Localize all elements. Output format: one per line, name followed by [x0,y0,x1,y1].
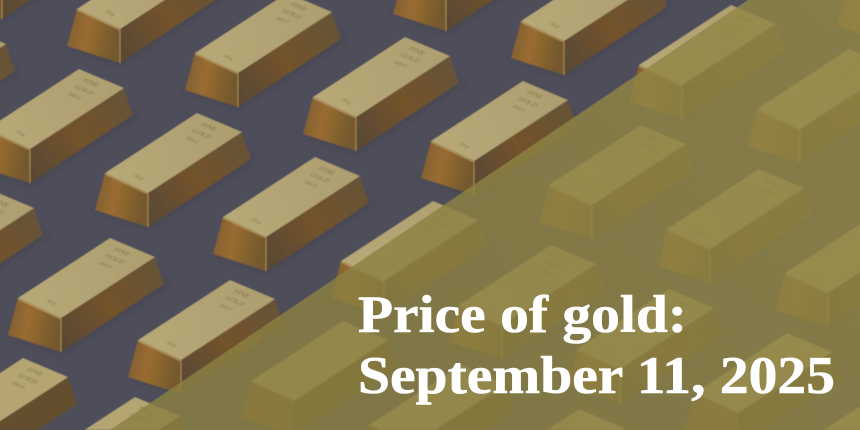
gold bar cut by bottom edge: FINE [24,367,45,377]
gold bar [128,280,286,396]
gold bar cut by bottom edge [824,377,860,430]
gold bar [185,0,343,109]
gold bar [421,81,579,197]
gold bar [0,69,135,185]
gold bar [449,245,607,361]
gold bar cut by bottom edge [368,365,515,430]
gold bar [539,125,697,241]
gold bar [629,5,787,121]
gold bar [8,238,166,354]
gold bar [0,25,17,141]
gold bar cut by bottom edge [84,397,185,430]
gold bar [657,169,815,285]
gold bar [67,0,225,65]
title line 1: Price of gold: [358,286,687,344]
gold bar cut by bottom edge [547,409,625,430]
gold bar cut by bottom edge [241,321,397,430]
gold bar cut by bottom edge [685,333,841,430]
gold bar [331,201,489,317]
gold bar [747,49,860,165]
gold bar cut by bottom edge: FINE [136,406,157,416]
gold bar [0,189,45,305]
title line 2: September 11, 2025 [358,347,835,405]
gold bar [213,157,371,273]
gold bar [95,113,253,229]
gold bar [303,37,461,153]
gold bar cut by bottom edge: 999.9 [10,381,26,390]
gold bar cut by bottom edge [0,358,77,430]
gold bar cut by bottom edge: GOLD [15,373,40,385]
gold bar [775,213,860,329]
gold bar [567,289,725,405]
gold bar [0,0,107,21]
title [358,286,835,405]
gold bar [393,0,551,33]
gold bar [511,0,669,77]
gold bar cut by bottom edge: GOLD [127,412,152,424]
gold bar [837,0,860,45]
